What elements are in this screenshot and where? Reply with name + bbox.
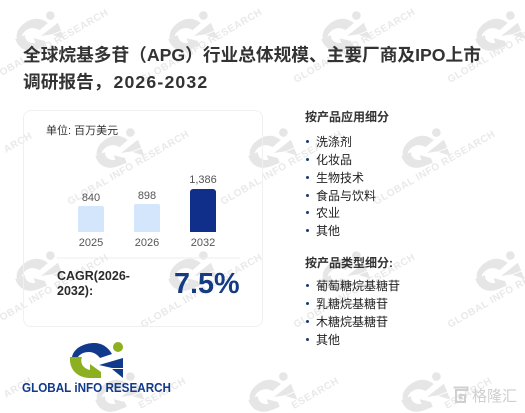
unit label: 单位: 百万美元 bbox=[46, 125, 118, 137]
list: application segments: 化妆品 bbox=[316, 153, 352, 167]
bar: 2026: 898 bbox=[138, 190, 156, 202]
CAGR label: CAGR(2026- bbox=[57, 269, 130, 283]
bar: 2026: 2026 bbox=[135, 237, 159, 249]
icon: badge square bbox=[454, 386, 468, 403]
bar: 2026 bbox=[134, 190, 160, 249]
title: 全球烷基多苷（APG）行业总体规模、主要厂商及IPO上市 bbox=[23, 45, 481, 65]
CAGR value: 7.5% bbox=[174, 268, 240, 300]
CAGR label bbox=[57, 269, 130, 298]
CAGR label: 2032): bbox=[57, 284, 93, 298]
heading: type segments: 按产品类型细分: bbox=[305, 256, 393, 270]
list: type segments: 葡萄糖烷基糖苷 bbox=[316, 279, 400, 293]
watermark pattern: ESEARCH bbox=[137, 376, 188, 412]
watermark pattern: GLOBAL INFO RESEARCH bbox=[139, 7, 265, 86]
watermark pattern: GLOBAL INFO RESEARCH bbox=[66, 129, 192, 208]
watermark pattern: ESEARCH bbox=[443, 376, 494, 412]
list: application segments bbox=[306, 135, 376, 238]
watermark pattern: ESEARCH bbox=[290, 376, 341, 412]
watermark pattern: GLOBAL INFO RESEARCH bbox=[292, 7, 418, 86]
title bbox=[23, 45, 481, 92]
watermark pattern: GLOBAL INFO RESEARCH bbox=[139, 252, 265, 331]
badge text: 格隆汇 bbox=[472, 388, 517, 405]
bar: 2032: 1,386 bbox=[189, 174, 217, 186]
list: type segments bbox=[306, 279, 400, 347]
watermark pattern: ARCH bbox=[2, 376, 34, 401]
watermark pattern: OBAL INFO RESEARCH bbox=[0, 7, 111, 79]
heading: application segments: 按产品应用细分 bbox=[305, 110, 389, 124]
watermark pattern: GLOBAL INFO RESEARCH bbox=[219, 129, 345, 208]
list: application segments: 其他 bbox=[316, 224, 340, 238]
bar: 2032: 2032 bbox=[191, 237, 215, 249]
list: type segments: 乳糖烷基糖苷 bbox=[316, 297, 388, 311]
watermark pattern: GLOBAL INFO RESEARCH bbox=[372, 129, 498, 208]
watermark pattern: ARCH bbox=[2, 131, 34, 156]
list: application segments: 农业 bbox=[316, 206, 340, 220]
bar chart bbox=[57, 174, 240, 258]
list: type segments: 木糖烷基糖苷 bbox=[316, 315, 388, 329]
bar: 2032 bbox=[189, 174, 217, 249]
bar: 2025: 2025 bbox=[79, 237, 103, 249]
bar: 2025 bbox=[78, 192, 104, 249]
bar: 2025: 840 bbox=[82, 192, 100, 204]
watermark pattern: GLOBAL INFO RESEARCH bbox=[292, 252, 418, 331]
list: application segments: 生物技术 bbox=[316, 171, 364, 185]
list: application segments: 食品与饮料 bbox=[316, 189, 376, 203]
logo: Global Info Research: GLOBAL iNFO RESEARCH bbox=[22, 380, 171, 395]
list: application segments: 洗涤剂 bbox=[316, 135, 352, 149]
title: 调研报告，2026-2032 bbox=[23, 72, 208, 92]
panel: market size card bbox=[23, 110, 263, 327]
list: type segments: 其他 bbox=[316, 333, 340, 347]
badge: source logo bbox=[454, 386, 517, 405]
watermark pattern: OBAL INFO RESEARCH bbox=[0, 252, 111, 324]
